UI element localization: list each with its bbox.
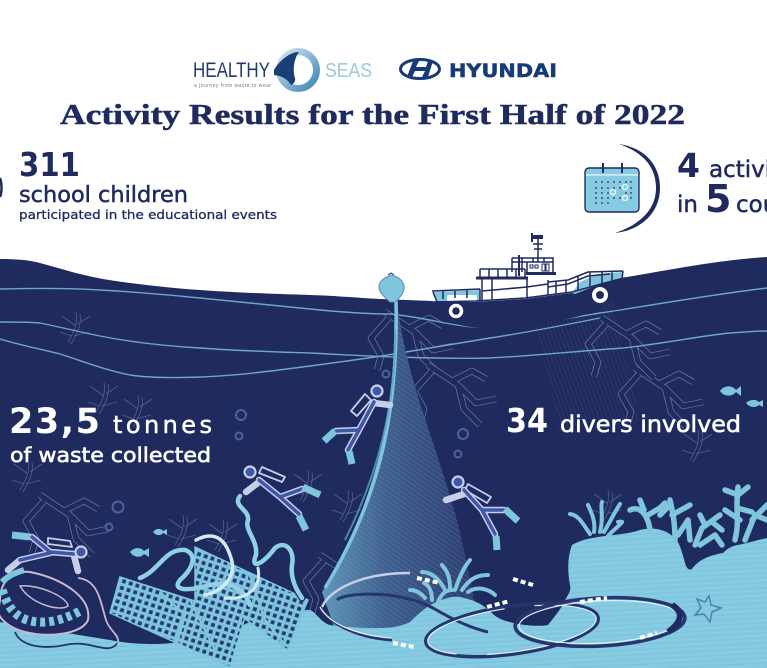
deck background — [432, 262, 623, 303]
logo: Healthy Seas — [193, 52, 372, 89]
stat: divers — [506, 401, 741, 440]
stat: activities and countries: 5 — [705, 177, 731, 221]
hull — [433, 278, 623, 329]
title: Activity Results for the First Half of 2022 — [60, 99, 685, 131]
rails and cabins — [432, 237, 623, 302]
diver 1 — [324, 386, 390, 464]
stat: tonnes of waste: of waste collected — [10, 443, 211, 467]
stat: divers: 34 — [506, 401, 548, 440]
faint background diver and coral outlines — [12, 312, 712, 615]
left ring net — [0, 570, 119, 648]
diver 2 — [244, 466, 320, 530]
net funnel — [322, 300, 480, 630]
stat: school children: participated in the educational events — [19, 207, 277, 222]
stat: school children: 311 — [19, 145, 80, 184]
stat: activities and countries: 4 — [677, 146, 700, 185]
coral — [630, 487, 767, 545]
life rings — [450, 306, 462, 316]
stat: divers: divers involved — [560, 412, 741, 438]
stat: tonnes of waste: 23,5 — [9, 402, 100, 442]
logo: Hyundai — [400, 60, 557, 82]
bow deck — [572, 272, 622, 294]
ring nets on seabed — [320, 573, 686, 666]
stern deck — [433, 290, 480, 302]
stat: activities and countries — [677, 146, 767, 221]
seabed — [0, 529, 767, 668]
sea background — [0, 257, 767, 668]
stat: tonnes of waste — [9, 402, 212, 467]
stat: school children: school children — [19, 183, 188, 208]
ghost net crates — [110, 547, 308, 667]
stat: tonnes of waste: tonnes — [113, 411, 212, 439]
icon: cut-off arc left — [0, 178, 2, 197]
logo: Healthy Seas: SEAS — [325, 60, 372, 82]
stat: school children — [19, 145, 277, 222]
seaweed right — [570, 502, 622, 536]
fish — [130, 386, 763, 557]
wave lines — [0, 288, 767, 378]
logo: Hyundai: HYUNDAI — [449, 60, 557, 82]
shaded water under the ship — [530, 290, 640, 430]
bubbles — [106, 370, 468, 530]
tangled ropes — [140, 496, 302, 605]
diver 4 — [8, 535, 86, 571]
ship — [432, 233, 623, 329]
logo: Healthy Seas: a journey from waste to wear — [194, 83, 271, 89]
icon: calendar — [585, 163, 639, 212]
stat: activities and countries: in — [677, 192, 698, 218]
logo: Healthy Seas: HEALTHY — [193, 59, 270, 82]
seaweed left — [410, 560, 495, 602]
starfish — [695, 596, 721, 622]
net floats — [393, 578, 657, 647]
diver 3 — [446, 476, 518, 550]
arc around calendar — [615, 144, 660, 233]
buoy — [379, 273, 404, 302]
